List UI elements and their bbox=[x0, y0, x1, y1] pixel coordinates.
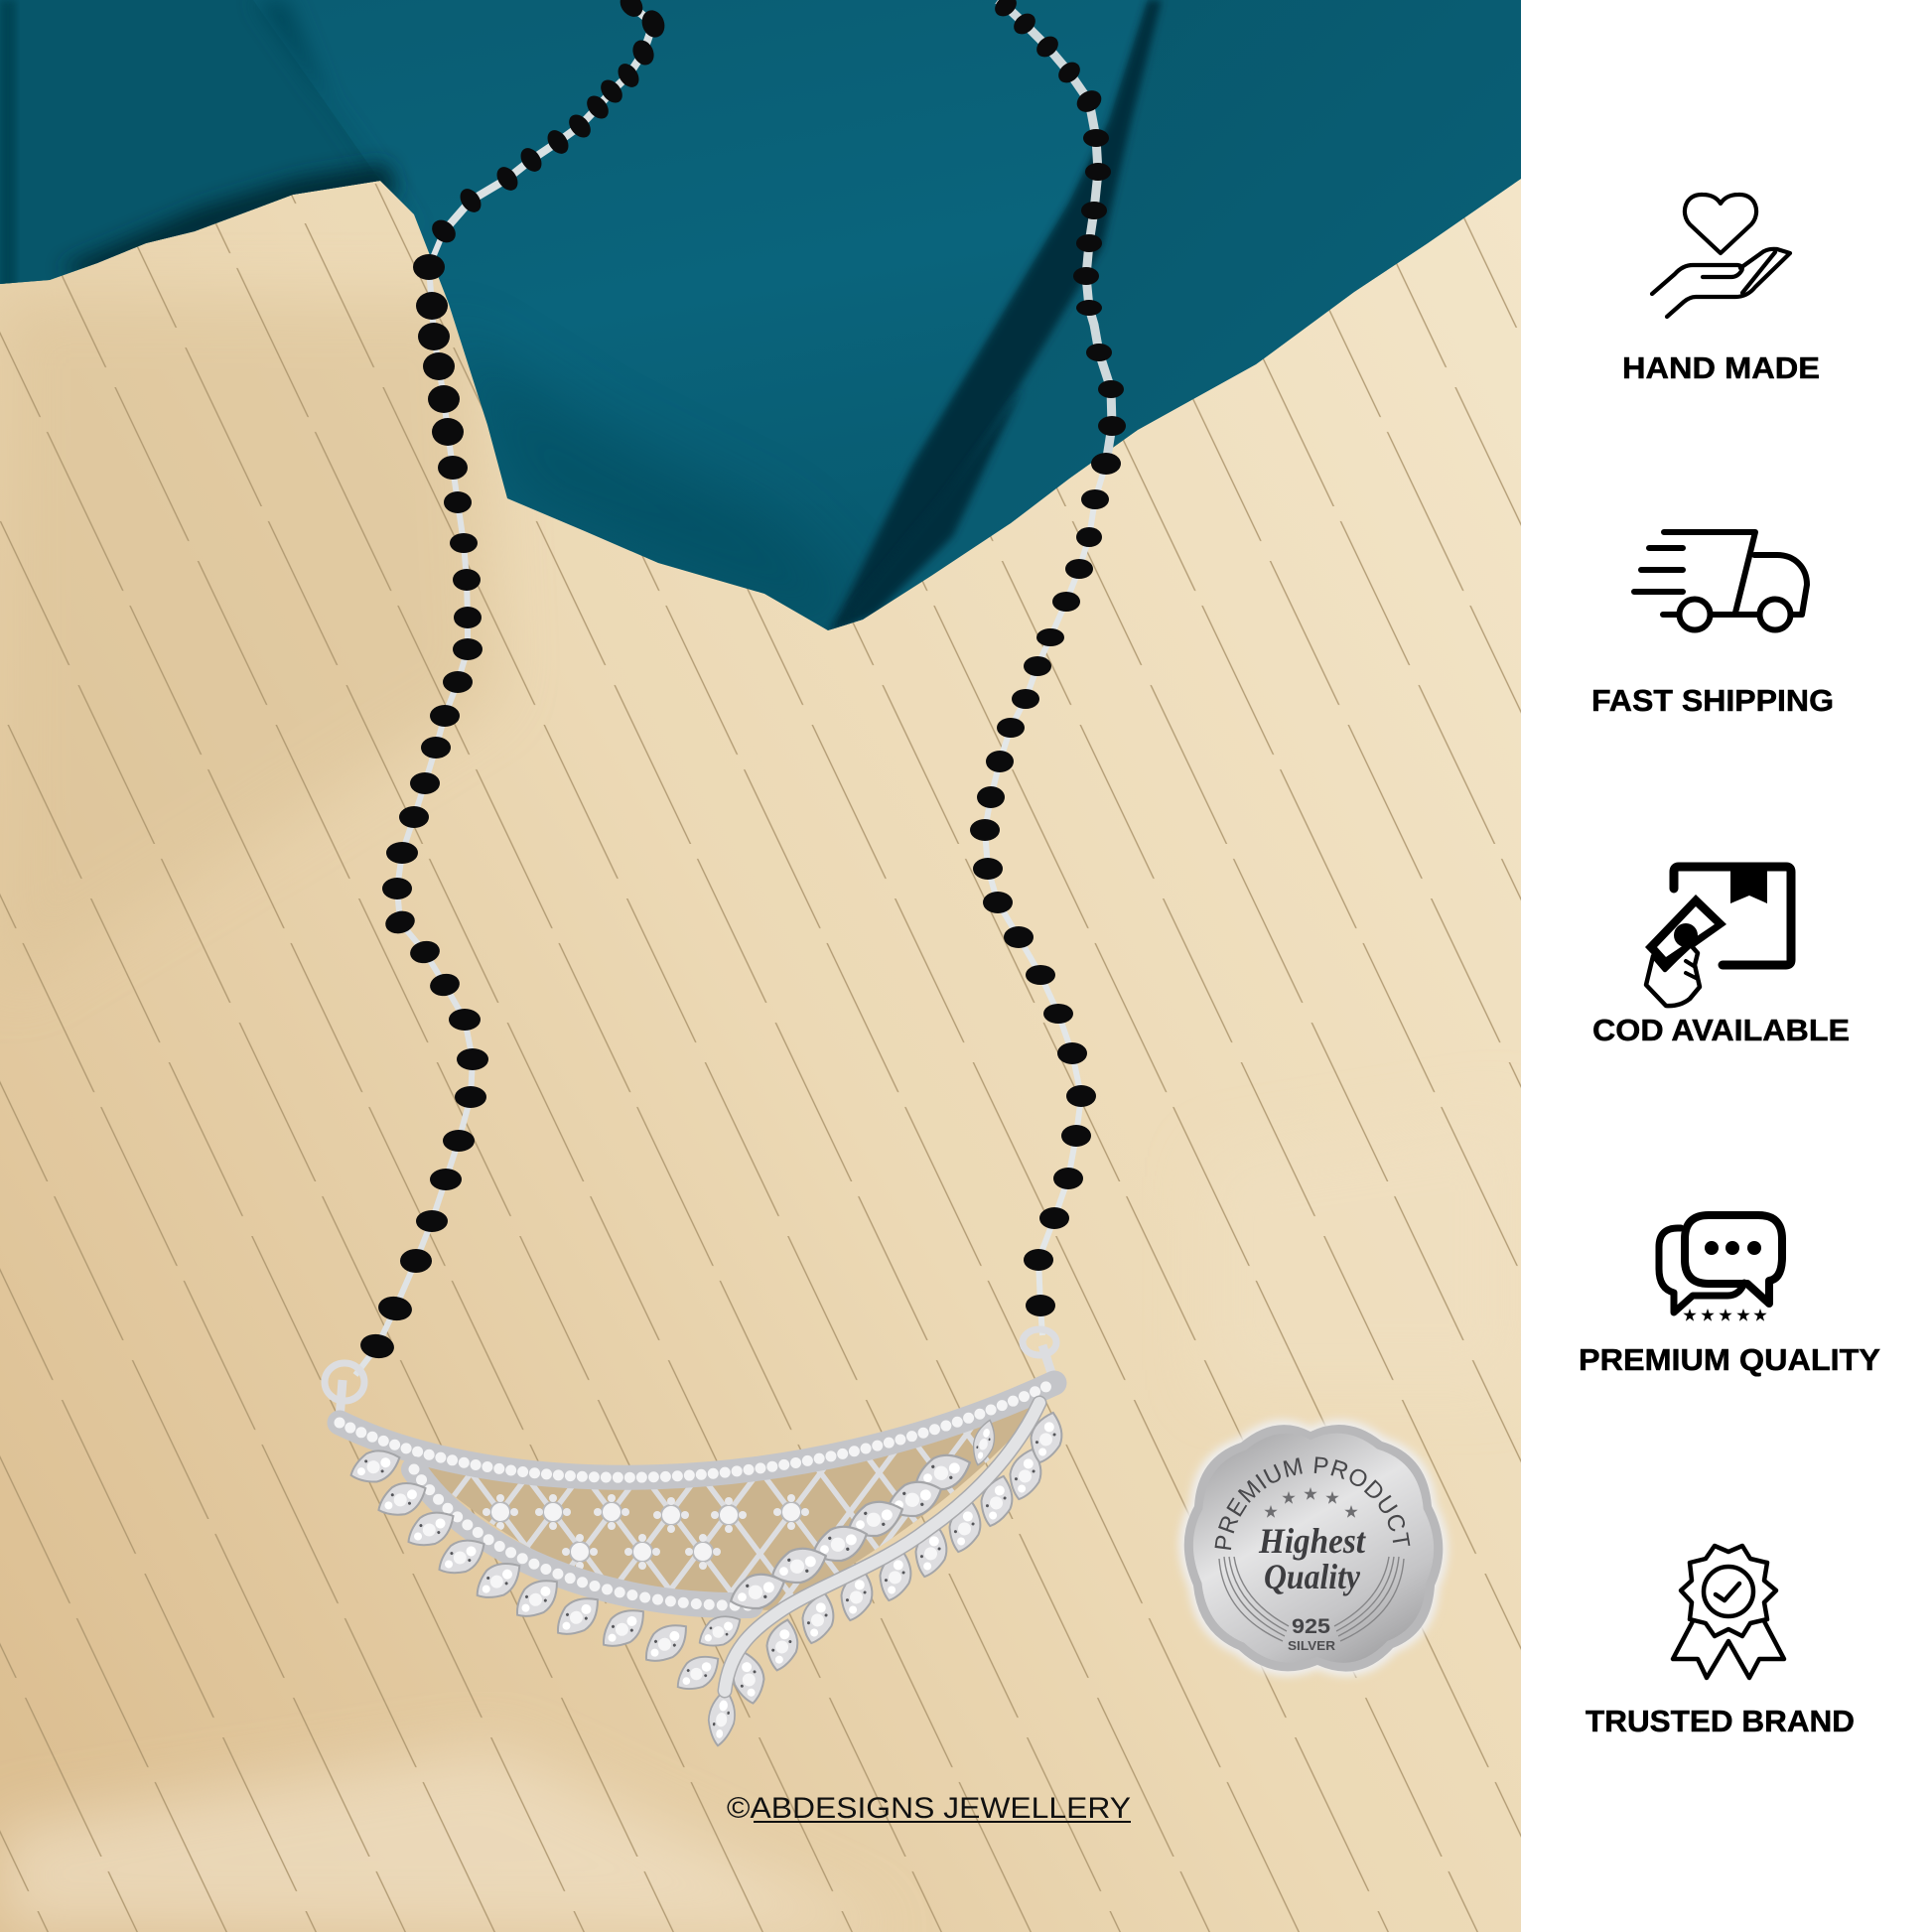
label: COD AVAILABLE: COD AVAILABLE bbox=[1592, 1013, 1850, 1047]
pendant branch stem bbox=[725, 1403, 1039, 1691]
label: PREMIUM QUALITY: PREMIUM QUALITY bbox=[1579, 1342, 1880, 1377]
pendant outer leaf row bbox=[345, 1444, 747, 1699]
feature: hand made bbox=[1622, 195, 1820, 385]
feature: cash on delivery bbox=[1592, 867, 1850, 1047]
icon: award rosette with check bbox=[1673, 1546, 1784, 1678]
label: FAST SHIPPING: FAST SHIPPING bbox=[1591, 683, 1834, 718]
feature: premium quality bbox=[1579, 1215, 1880, 1377]
icon: heart in hand bbox=[1652, 195, 1790, 317]
pendant lattice bbox=[429, 1408, 1029, 1610]
label: HAND MADE: HAND MADE bbox=[1622, 350, 1820, 385]
icon: delivery truck bbox=[1634, 532, 1807, 629]
badge curved title: PREMIUM PRODUCT bbox=[1215, 1456, 1410, 1550]
copyright text: ©ABDESIGNS JEWELLERY bbox=[727, 1792, 1131, 1825]
pendant leaves above branch bbox=[725, 1418, 1000, 1617]
badge text: Quality: Quality bbox=[1264, 1557, 1361, 1596]
badge mid ring bbox=[1184, 1425, 1443, 1672]
badge text: 925: 925 bbox=[1292, 1615, 1330, 1638]
panel: product photo bbox=[0, 0, 1521, 1932]
badge stars bbox=[1264, 1487, 1358, 1518]
feature: trusted brand bbox=[1586, 1546, 1855, 1738]
badge outer edge bbox=[1179, 1420, 1449, 1677]
label: TRUSTED BRAND: TRUSTED BRAND bbox=[1586, 1704, 1855, 1738]
silver 925 quality badge bbox=[1175, 1416, 1451, 1680]
badge face bbox=[1193, 1434, 1434, 1663]
pendant lower stone arc bbox=[414, 1469, 751, 1605]
pendant top stone bar bbox=[340, 1383, 1054, 1477]
icon: chat bubbles with stars bbox=[1659, 1215, 1782, 1321]
silver pendant bbox=[325, 1329, 1120, 1747]
feature: fast shipping bbox=[1591, 532, 1834, 718]
teal fabric bbox=[0, 0, 1521, 695]
icon: box with cash in hand bbox=[1645, 867, 1791, 1006]
black bead chain, left strand bbox=[355, 0, 668, 1375]
badge text: SILVER: SILVER bbox=[1288, 1638, 1336, 1653]
black bead chain, right strand bbox=[970, 0, 1126, 1335]
paper backdrop bbox=[0, 0, 1521, 1932]
badge text: Highest: Highest bbox=[1258, 1521, 1366, 1561]
pendant leaves below branch bbox=[705, 1409, 1067, 1747]
pendant rings bbox=[325, 1329, 1056, 1420]
badge wave lines bbox=[1219, 1557, 1404, 1641]
